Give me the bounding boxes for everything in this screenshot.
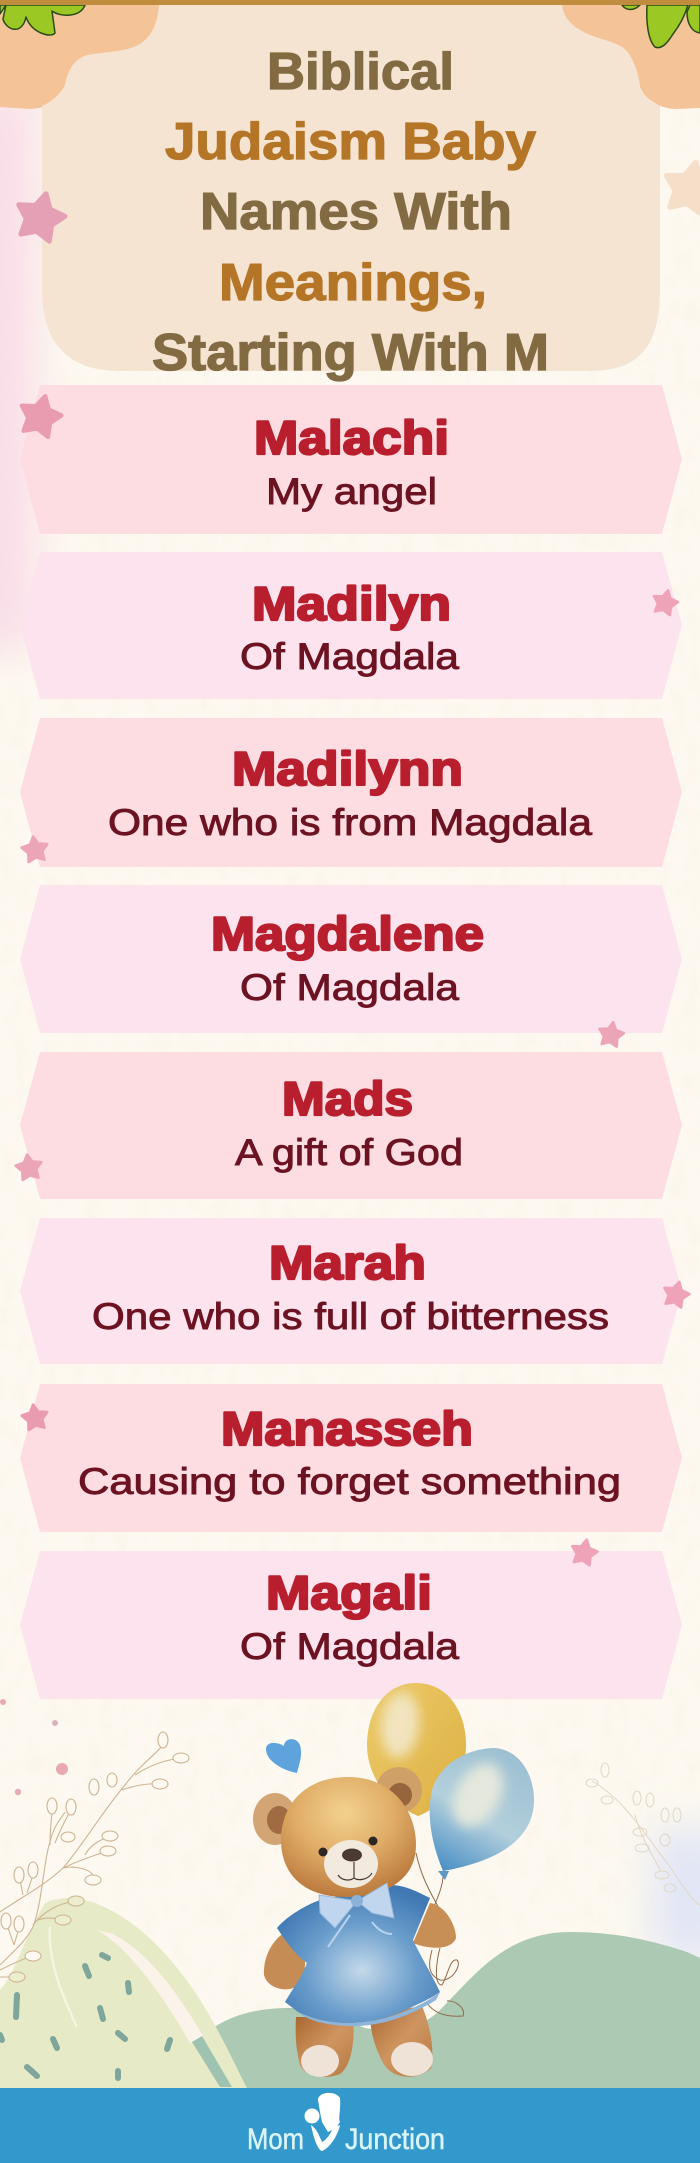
star: peach right bbox=[660, 157, 700, 216]
right eye bbox=[368, 1836, 378, 1846]
right arm bbox=[413, 1903, 456, 1948]
yellow balloon bbox=[367, 1683, 466, 1816]
head bbox=[281, 1777, 416, 1897]
balloon strings bbox=[416, 1853, 464, 2016]
corner blob: top left bbox=[0, 5, 159, 109]
branches: left bbox=[0, 1732, 189, 1982]
logo mark bbox=[304, 2093, 340, 2151]
panel: Mads bbox=[20, 1052, 682, 1199]
hill: sage green bbox=[205, 1932, 700, 2088]
meaning: Of Magdala bbox=[240, 636, 459, 677]
name: Mads bbox=[282, 1072, 413, 1125]
meaning: Of Magdala bbox=[240, 1626, 459, 1667]
panel: Madilyn bbox=[20, 552, 682, 699]
meaning: One who is from Magdala bbox=[108, 802, 592, 843]
bow knot bbox=[351, 1895, 363, 1907]
bow ribbons bbox=[328, 1915, 392, 1947]
title line 2: Judaism Baby bbox=[165, 113, 536, 171]
name: Malachi bbox=[254, 411, 449, 464]
leaves: top left bbox=[0, 5, 85, 35]
blue balloon bbox=[430, 1748, 534, 1880]
left ear bbox=[253, 1793, 297, 1845]
title line 3: Names With bbox=[200, 183, 512, 241]
panel: Malachi bbox=[20, 385, 682, 534]
name: Manasseh bbox=[221, 1402, 473, 1455]
name: Magdalene bbox=[211, 907, 484, 960]
name: Madilynn bbox=[232, 742, 463, 795]
meaning: One who is full of bitterness bbox=[92, 1296, 609, 1337]
name: Magali bbox=[266, 1566, 432, 1619]
icon: blue heart bbox=[266, 1739, 301, 1773]
star: Manasseh panel bbox=[20, 1403, 49, 1431]
mouth bbox=[338, 1862, 372, 1880]
star: Madilyn panel bbox=[650, 587, 680, 616]
meaning: Of Magdala bbox=[240, 967, 459, 1008]
star: Madilynn panel bbox=[20, 835, 49, 863]
left arm bbox=[264, 1932, 305, 1989]
title panel bbox=[42, 5, 660, 371]
name: Madilyn bbox=[252, 577, 451, 630]
balloon knot bbox=[438, 1871, 449, 1880]
pink wash on left edge bbox=[0, 90, 35, 650]
branches: right bbox=[586, 1763, 700, 1905]
dots bbox=[0, 1699, 68, 1795]
bow bbox=[319, 1883, 394, 1928]
title line 4: Meanings, bbox=[219, 254, 487, 312]
dress bbox=[277, 1885, 440, 2023]
left eye bbox=[318, 1848, 328, 1856]
muzzle bbox=[324, 1840, 378, 1888]
blue wash on right edge bbox=[655, 1830, 700, 1960]
star: top of Malachi panel bbox=[16, 391, 65, 439]
logo: MomJunction bbox=[247, 2093, 445, 2156]
star: beside title bbox=[12, 188, 69, 243]
leaves: top right bbox=[622, 5, 700, 48]
panel: Madilynn bbox=[20, 718, 682, 867]
panel: Marah bbox=[20, 1218, 682, 1364]
nose bbox=[342, 1848, 362, 1862]
wordmark: Mom: Mom bbox=[247, 2123, 304, 2156]
right ear bbox=[376, 1767, 422, 1813]
right leg bbox=[370, 2006, 432, 2077]
illustration: balloons bbox=[367, 1683, 534, 2016]
star: Magali panel bbox=[569, 1537, 599, 1566]
corner blob: top right bbox=[562, 5, 700, 109]
title bbox=[152, 43, 549, 382]
dashes bbox=[0, 1955, 170, 2078]
panel: Manasseh bbox=[20, 1384, 682, 1532]
right paw bbox=[391, 2042, 433, 2076]
wordmark: Junction: Junction bbox=[345, 2123, 445, 2156]
meaning: A gift of God bbox=[235, 1132, 463, 1173]
white band bbox=[97, 1930, 203, 2043]
top bar bbox=[0, 0, 700, 5]
panel: Magali bbox=[20, 1551, 682, 1699]
title line 1: Biblical bbox=[267, 43, 454, 101]
meaning: Causing to forget something bbox=[78, 1461, 621, 1502]
sage strip bbox=[192, 2036, 232, 2087]
name: Marah bbox=[269, 1236, 426, 1289]
star: Magdalene panel bbox=[597, 1020, 625, 1048]
thin highlight bbox=[50, 1927, 77, 2027]
star: Mads panel bbox=[14, 1153, 43, 1181]
title line 5: Starting With M bbox=[152, 324, 549, 382]
panel: Magdalene bbox=[20, 885, 682, 1033]
illustration: teddy bear bbox=[253, 1767, 456, 2077]
left paw bbox=[301, 2045, 339, 2077]
dress hem bbox=[298, 1992, 440, 2026]
left leg bbox=[296, 2017, 354, 2077]
hill: light green with dashes bbox=[0, 1898, 247, 2088]
meaning: My angel bbox=[266, 471, 437, 512]
star: Marah panel bbox=[661, 1279, 692, 1309]
footer bar bbox=[0, 2088, 700, 2163]
